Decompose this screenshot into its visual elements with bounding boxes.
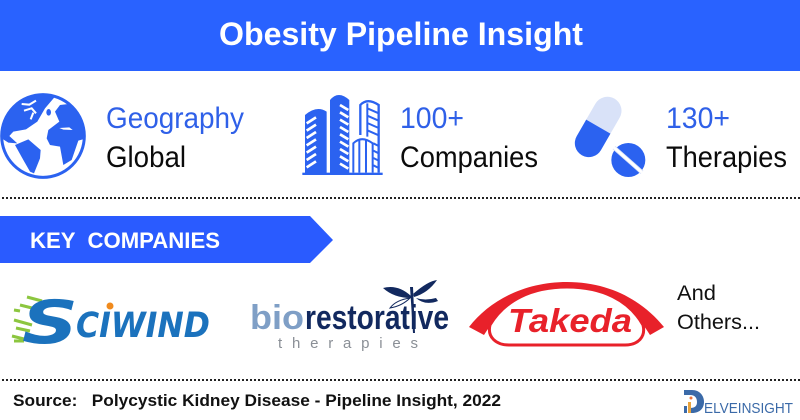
logo: Sciwind [12,288,210,358]
logo: Takeda [469,282,664,345]
logo: Sciwind: CIWIND [76,306,210,346]
and others note: Others... [677,311,760,334]
source line: Source: Polycystic Kidney Disease - Pipeline Insight, 2022 [13,391,501,410]
icon: globe [0,93,87,177]
logo: BioRestorative Therapies: therapies [278,335,418,352]
key companies banner: KEY COMPANIES [30,228,220,253]
icon: office buildings [302,95,383,175]
and others note [677,282,760,334]
header band [0,0,800,71]
companies text [400,102,538,174]
logo: DelveInsight [684,390,793,417]
logo: Sciwind: S [22,288,78,358]
key companies banner [0,216,333,263]
companies text: Companies [400,141,538,174]
therapies text: 130+ [666,102,730,135]
logo: BioRestorative Therapies: restorative [305,299,449,337]
companies text: 100+ [400,102,464,135]
and others note: And [677,282,716,305]
logo: Takeda: Takeda [508,302,632,339]
logo: BioRestorative Therapies: bio [250,299,304,337]
geography text [106,102,244,174]
logo: DelveInsight: ELVEINSIGHT [704,400,793,417]
therapies text [666,102,787,174]
logo: BioRestorative Therapies [250,280,449,352]
geography text: Geography [106,102,244,135]
title: Obesity Pipeline Insight [219,16,583,52]
geography text: Global [106,141,186,174]
therapies text: Therapies [666,141,787,174]
icon: pills [570,92,645,177]
